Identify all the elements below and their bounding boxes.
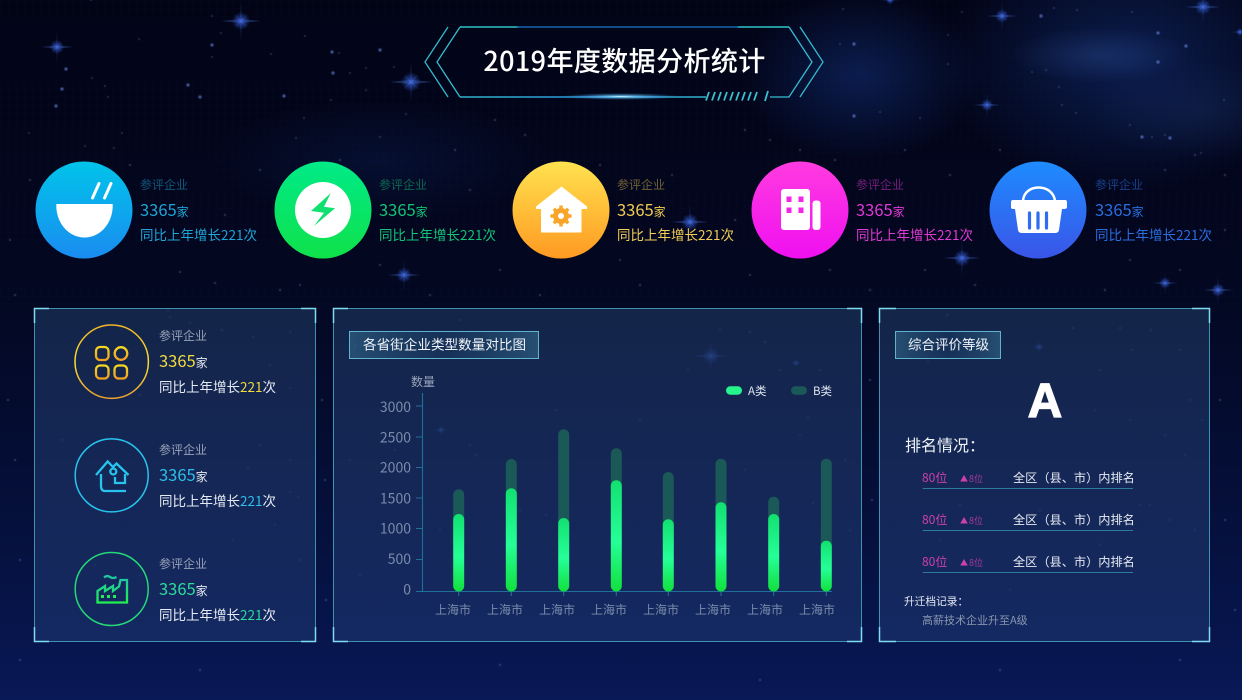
stat text: 同比上年增长221次 bbox=[159, 604, 276, 624]
upgrade record bbox=[904, 594, 1028, 628]
row: green factory bbox=[75, 552, 276, 626]
ranking rows: 全区（县、市）内排名 bbox=[1013, 552, 1135, 570]
panel: bar chart bbox=[334, 308, 862, 642]
stat text bbox=[159, 441, 276, 510]
stat text bbox=[159, 327, 276, 396]
stat 2: green bolt bbox=[274, 162, 496, 258]
icon: lightning bbox=[274, 162, 372, 258]
axis: 2000 bbox=[380, 458, 411, 478]
icon: factory bbox=[75, 552, 148, 626]
ranking rows: 全区（县、市）内排名 bbox=[1013, 468, 1135, 486]
axis: 2500 bbox=[380, 428, 411, 448]
axis: 1000 bbox=[380, 518, 411, 538]
stat text: 参评企业 bbox=[379, 176, 427, 193]
icon: building bbox=[752, 162, 848, 258]
stat text bbox=[1095, 176, 1212, 244]
series B bars bbox=[453, 429, 832, 569]
ranking rows: ▲ bbox=[960, 558, 968, 568]
ranking rows: 80位 bbox=[922, 553, 947, 570]
legend bbox=[726, 383, 833, 399]
legend: B类 bbox=[813, 383, 833, 399]
stat text: 同比上年增长221次 bbox=[379, 224, 496, 244]
ranking rows: 8位 bbox=[969, 472, 983, 485]
ranking rows: ▲ bbox=[960, 474, 968, 484]
row: cyan house bbox=[75, 439, 276, 512]
title text: 2019年度数据分析统计 bbox=[483, 40, 766, 79]
stat text: 参评企业 bbox=[617, 176, 665, 193]
stat text: 3365家 bbox=[159, 576, 208, 600]
axis: 上海市 bbox=[799, 601, 835, 618]
panel: left stats bbox=[34, 308, 316, 642]
upgrade record: 高薪技术企业升至A级 bbox=[922, 612, 1028, 628]
stat text: 同比上年增长221次 bbox=[159, 490, 276, 510]
axis: 上海市 bbox=[695, 601, 731, 618]
stat text: 3365家 bbox=[617, 197, 666, 221]
stat text: 同比上年增长221次 bbox=[159, 376, 276, 396]
ranking rows: 80位 bbox=[922, 469, 947, 486]
stat text: 3365家 bbox=[159, 462, 208, 486]
stat 3: yellow house bbox=[512, 162, 734, 258]
stat text: 同比上年增长221次 bbox=[140, 224, 257, 244]
title banner bbox=[425, 27, 823, 101]
axis: 0 bbox=[403, 580, 411, 600]
stat text: 参评企业 bbox=[159, 555, 207, 572]
stat text: 3365家 bbox=[1095, 197, 1144, 221]
stat text: 3365家 bbox=[379, 197, 428, 221]
stat text: 参评企业 bbox=[140, 176, 188, 193]
stat text bbox=[617, 176, 734, 244]
stat text: 3365家 bbox=[140, 197, 189, 221]
ranking rows: 80位 bbox=[922, 511, 947, 528]
icon: house outline bbox=[75, 439, 148, 512]
axis bbox=[380, 373, 835, 618]
stat text: 参评企业 bbox=[159, 441, 207, 458]
stat text: 3365家 bbox=[856, 197, 905, 221]
stat text: 参评企业 bbox=[159, 327, 207, 344]
stat text: 同比上年增长221次 bbox=[856, 224, 973, 244]
stat text: 3365家 bbox=[159, 348, 208, 372]
stat 1: blue bowl bbox=[36, 162, 257, 258]
stat 4: magenta building bbox=[752, 162, 973, 258]
series A bars bbox=[453, 480, 832, 592]
row: yellow apps bbox=[75, 325, 276, 398]
icon: basket bbox=[990, 162, 1086, 258]
ranking heading: 排名情况： bbox=[905, 432, 985, 456]
axis: 1500 bbox=[380, 488, 411, 508]
ranking rows bbox=[922, 468, 1135, 572]
ranking rows: 全区（县、市）内排名 bbox=[1013, 510, 1135, 528]
title frame bbox=[425, 27, 823, 101]
stat text: 同比上年增长221次 bbox=[1095, 224, 1212, 244]
rating heading: 综合评价等级 bbox=[908, 334, 989, 354]
panel: rating bbox=[880, 308, 1210, 642]
stat text bbox=[856, 176, 973, 244]
stat text: 同比上年增长221次 bbox=[617, 224, 734, 244]
stat text: 参评企业 bbox=[856, 176, 904, 193]
panel frame bbox=[34, 308, 316, 642]
icon: app grid bbox=[75, 325, 148, 398]
axis: 数量 bbox=[411, 373, 435, 390]
stat text bbox=[159, 555, 276, 624]
chart heading: 各省街企业类型数量对比图 bbox=[363, 334, 526, 354]
ranking rows: 8位 bbox=[969, 556, 983, 569]
axis: 上海市 bbox=[747, 601, 783, 618]
legend: A类 bbox=[748, 383, 767, 399]
axis: 上海市 bbox=[643, 601, 679, 618]
axis: 上海市 bbox=[435, 601, 471, 618]
axis: 3000 bbox=[380, 397, 411, 417]
stat text bbox=[379, 176, 496, 244]
grade letter: A bbox=[1028, 375, 1062, 428]
axis: 500 bbox=[388, 549, 411, 569]
axis: 上海市 bbox=[591, 601, 627, 618]
stat text bbox=[140, 176, 257, 244]
stat text: 参评企业 bbox=[1095, 176, 1143, 193]
rating heading bbox=[896, 332, 1000, 358]
ranking rows: ▲ bbox=[960, 516, 968, 526]
axis: 上海市 bbox=[539, 601, 575, 618]
icon: bowl bbox=[36, 162, 132, 258]
panel frame bbox=[334, 308, 862, 642]
icon: house with gear bbox=[512, 162, 610, 258]
axis: 上海市 bbox=[487, 601, 523, 618]
ranking rows: 8位 bbox=[969, 514, 983, 527]
upgrade record: 升迁档记录： bbox=[904, 594, 968, 609]
chart heading bbox=[350, 332, 538, 358]
stat 5: blue basket bbox=[990, 162, 1212, 258]
panel frame bbox=[880, 308, 1210, 642]
